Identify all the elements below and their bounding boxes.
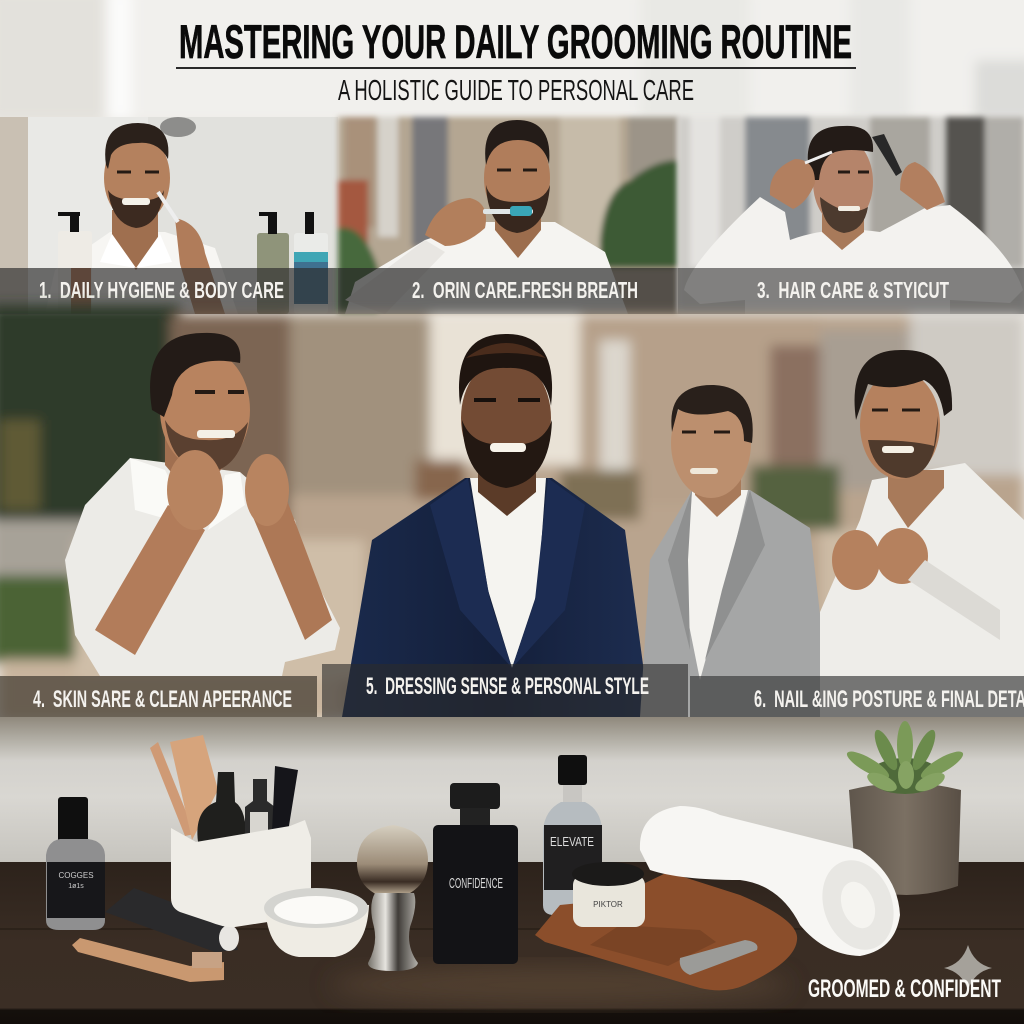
man brushing	[45, 123, 238, 314]
title rule	[176, 67, 856, 69]
bottles	[58, 212, 328, 314]
caption bar 4	[0, 676, 317, 717]
caption bar 2	[338, 268, 678, 314]
man in grey suit	[640, 385, 832, 717]
wall	[0, 717, 1024, 863]
blurred header backdrop	[0, 0, 1024, 120]
elevate bottle: ELEVATE	[550, 834, 594, 849]
jar	[572, 862, 645, 927]
caption bar 5: 5. DRESSING SENSE & PERSONAL STYLE	[366, 673, 649, 700]
leather pouch	[535, 872, 797, 990]
confidence bottle: CONFIDENCE	[449, 875, 503, 892]
caption bar 1: 1. DAILY HYGIENE & BODY CARE	[39, 277, 284, 303]
man in navy suit	[342, 334, 650, 717]
man brushing teeth	[345, 120, 628, 314]
towel roll	[640, 806, 906, 960]
left bottle: 1ø1s	[68, 883, 84, 890]
man styling hair	[684, 126, 1023, 314]
cup with tools	[150, 735, 311, 927]
jar: PIKTOR	[593, 900, 623, 909]
city background	[678, 117, 1024, 315]
man touching face	[65, 333, 340, 676]
man buttoning shirt	[820, 350, 1024, 717]
nail clipper	[680, 940, 758, 975]
shaving brush	[357, 825, 428, 971]
caption bar 6	[690, 676, 1024, 717]
subtitle: A HOLISTIC GUIDE TO PERSONAL CARE	[338, 75, 694, 107]
panel: hair care	[678, 117, 1024, 315]
wooden table	[0, 862, 1024, 1024]
caption bar 4: 4. SKIN SARE & CLEAN APEERANCE	[33, 686, 292, 713]
potted succulent	[844, 721, 966, 895]
caption bar 1	[0, 268, 338, 314]
caption bar 2: 2. ORIN CARE.FRESH BREATH	[412, 277, 638, 303]
caption bar 5	[322, 664, 688, 717]
city background	[338, 117, 678, 315]
header band	[0, 0, 1024, 120]
elevate bottle	[543, 755, 602, 915]
confidence bottle	[433, 783, 518, 964]
street background	[0, 305, 1024, 720]
shower head	[160, 117, 196, 137]
panel: main street scene	[0, 305, 1024, 720]
caption bar 3	[678, 268, 1024, 314]
bowl of cream	[264, 888, 369, 957]
logo star	[944, 945, 992, 990]
tube and toothbrush	[72, 888, 239, 982]
panel: oral care	[338, 117, 678, 315]
left bottle: COGGES	[58, 871, 94, 880]
left bottle	[46, 797, 105, 930]
bathroom background	[0, 117, 338, 315]
panel: grooming products	[0, 717, 1024, 1024]
panel: daily hygiene	[0, 117, 338, 315]
